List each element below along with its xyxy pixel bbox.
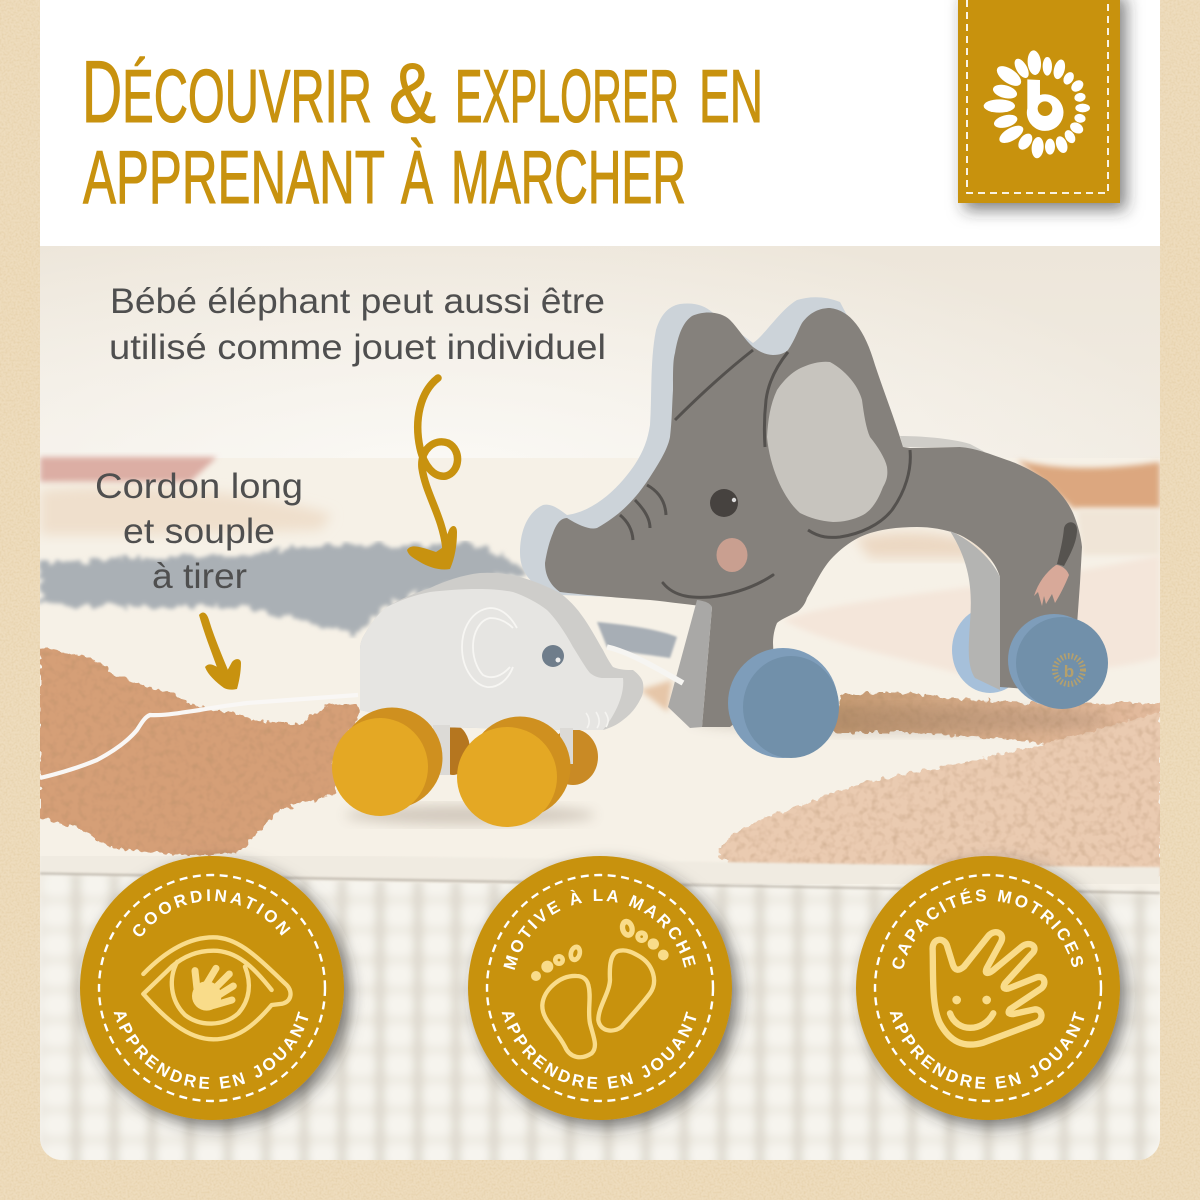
photo scene: toys on rug xyxy=(40,246,1160,1170)
eye xyxy=(542,645,564,667)
rear back wheel xyxy=(952,613,1008,693)
callout text: cord: à tirer xyxy=(152,557,247,596)
callout text: baby elephant: utilisé comme jouet individuel xyxy=(109,328,606,367)
callout text: cord: et souple xyxy=(123,512,275,551)
rear leg side xyxy=(950,531,1000,690)
ear and head lines xyxy=(620,350,910,540)
tail xyxy=(1057,522,1077,566)
arrow: curly xyxy=(407,378,458,570)
callout text: cord xyxy=(95,467,303,596)
badge bottom text: APPRENDRE EN JOUANT xyxy=(114,1011,308,1089)
badge top text: CAPACITÉS MOTRICES xyxy=(892,888,1084,969)
title: & xyxy=(389,46,436,140)
icon: sun logo xyxy=(984,50,1090,159)
front wheel xyxy=(728,648,839,758)
front of body xyxy=(545,308,1082,727)
callout text: cord: Cordon long xyxy=(95,467,303,506)
icon: footprints xyxy=(531,917,669,1057)
cheek xyxy=(716,538,748,572)
callout text: baby elephant: Bébé éléphant peut aussi être xyxy=(110,282,605,321)
icon: smiling hand xyxy=(933,932,1044,1045)
arrow: short xyxy=(199,613,241,690)
yellow wheels xyxy=(332,708,570,827)
badge: capacites motrices xyxy=(850,852,1138,1138)
header panel xyxy=(40,0,1160,246)
mouth xyxy=(663,575,773,597)
rear wheel xyxy=(1008,614,1108,709)
title xyxy=(82,42,763,219)
brand tag with logo xyxy=(958,0,1120,203)
title: MARCHER xyxy=(451,135,686,219)
rear wheel: b xyxy=(1064,662,1074,681)
rug colour shapes xyxy=(40,457,1160,877)
ear lines xyxy=(462,608,517,687)
title: APPRENANT xyxy=(83,135,385,219)
badge: motive a la marche xyxy=(462,851,750,1138)
small elephant xyxy=(332,573,643,827)
callout text: baby elephant xyxy=(109,282,606,367)
large elephant xyxy=(520,297,1110,758)
badge: coordination xyxy=(74,852,362,1138)
cord xyxy=(40,695,358,778)
ear xyxy=(767,362,887,522)
badge top text: MOTIVE À LA MARCHE xyxy=(503,889,696,970)
title: EN xyxy=(699,54,763,138)
badge bottom text: APPRENDRE EN JOUANT xyxy=(502,1011,696,1089)
front leg side xyxy=(668,600,712,728)
badge top text: COORDINATION xyxy=(133,889,291,936)
eye xyxy=(710,489,738,517)
title: À xyxy=(401,135,433,219)
knit rug foreground xyxy=(40,860,1160,1170)
title: EXPLORER xyxy=(455,54,679,138)
title: DÉCOUVRIR xyxy=(82,42,372,141)
badge bottom text: APPRENDRE EN JOUANT xyxy=(890,1011,1084,1089)
side edge of body xyxy=(520,297,860,600)
icon: eye with hand xyxy=(143,937,291,1039)
cord between elephants xyxy=(607,647,683,683)
